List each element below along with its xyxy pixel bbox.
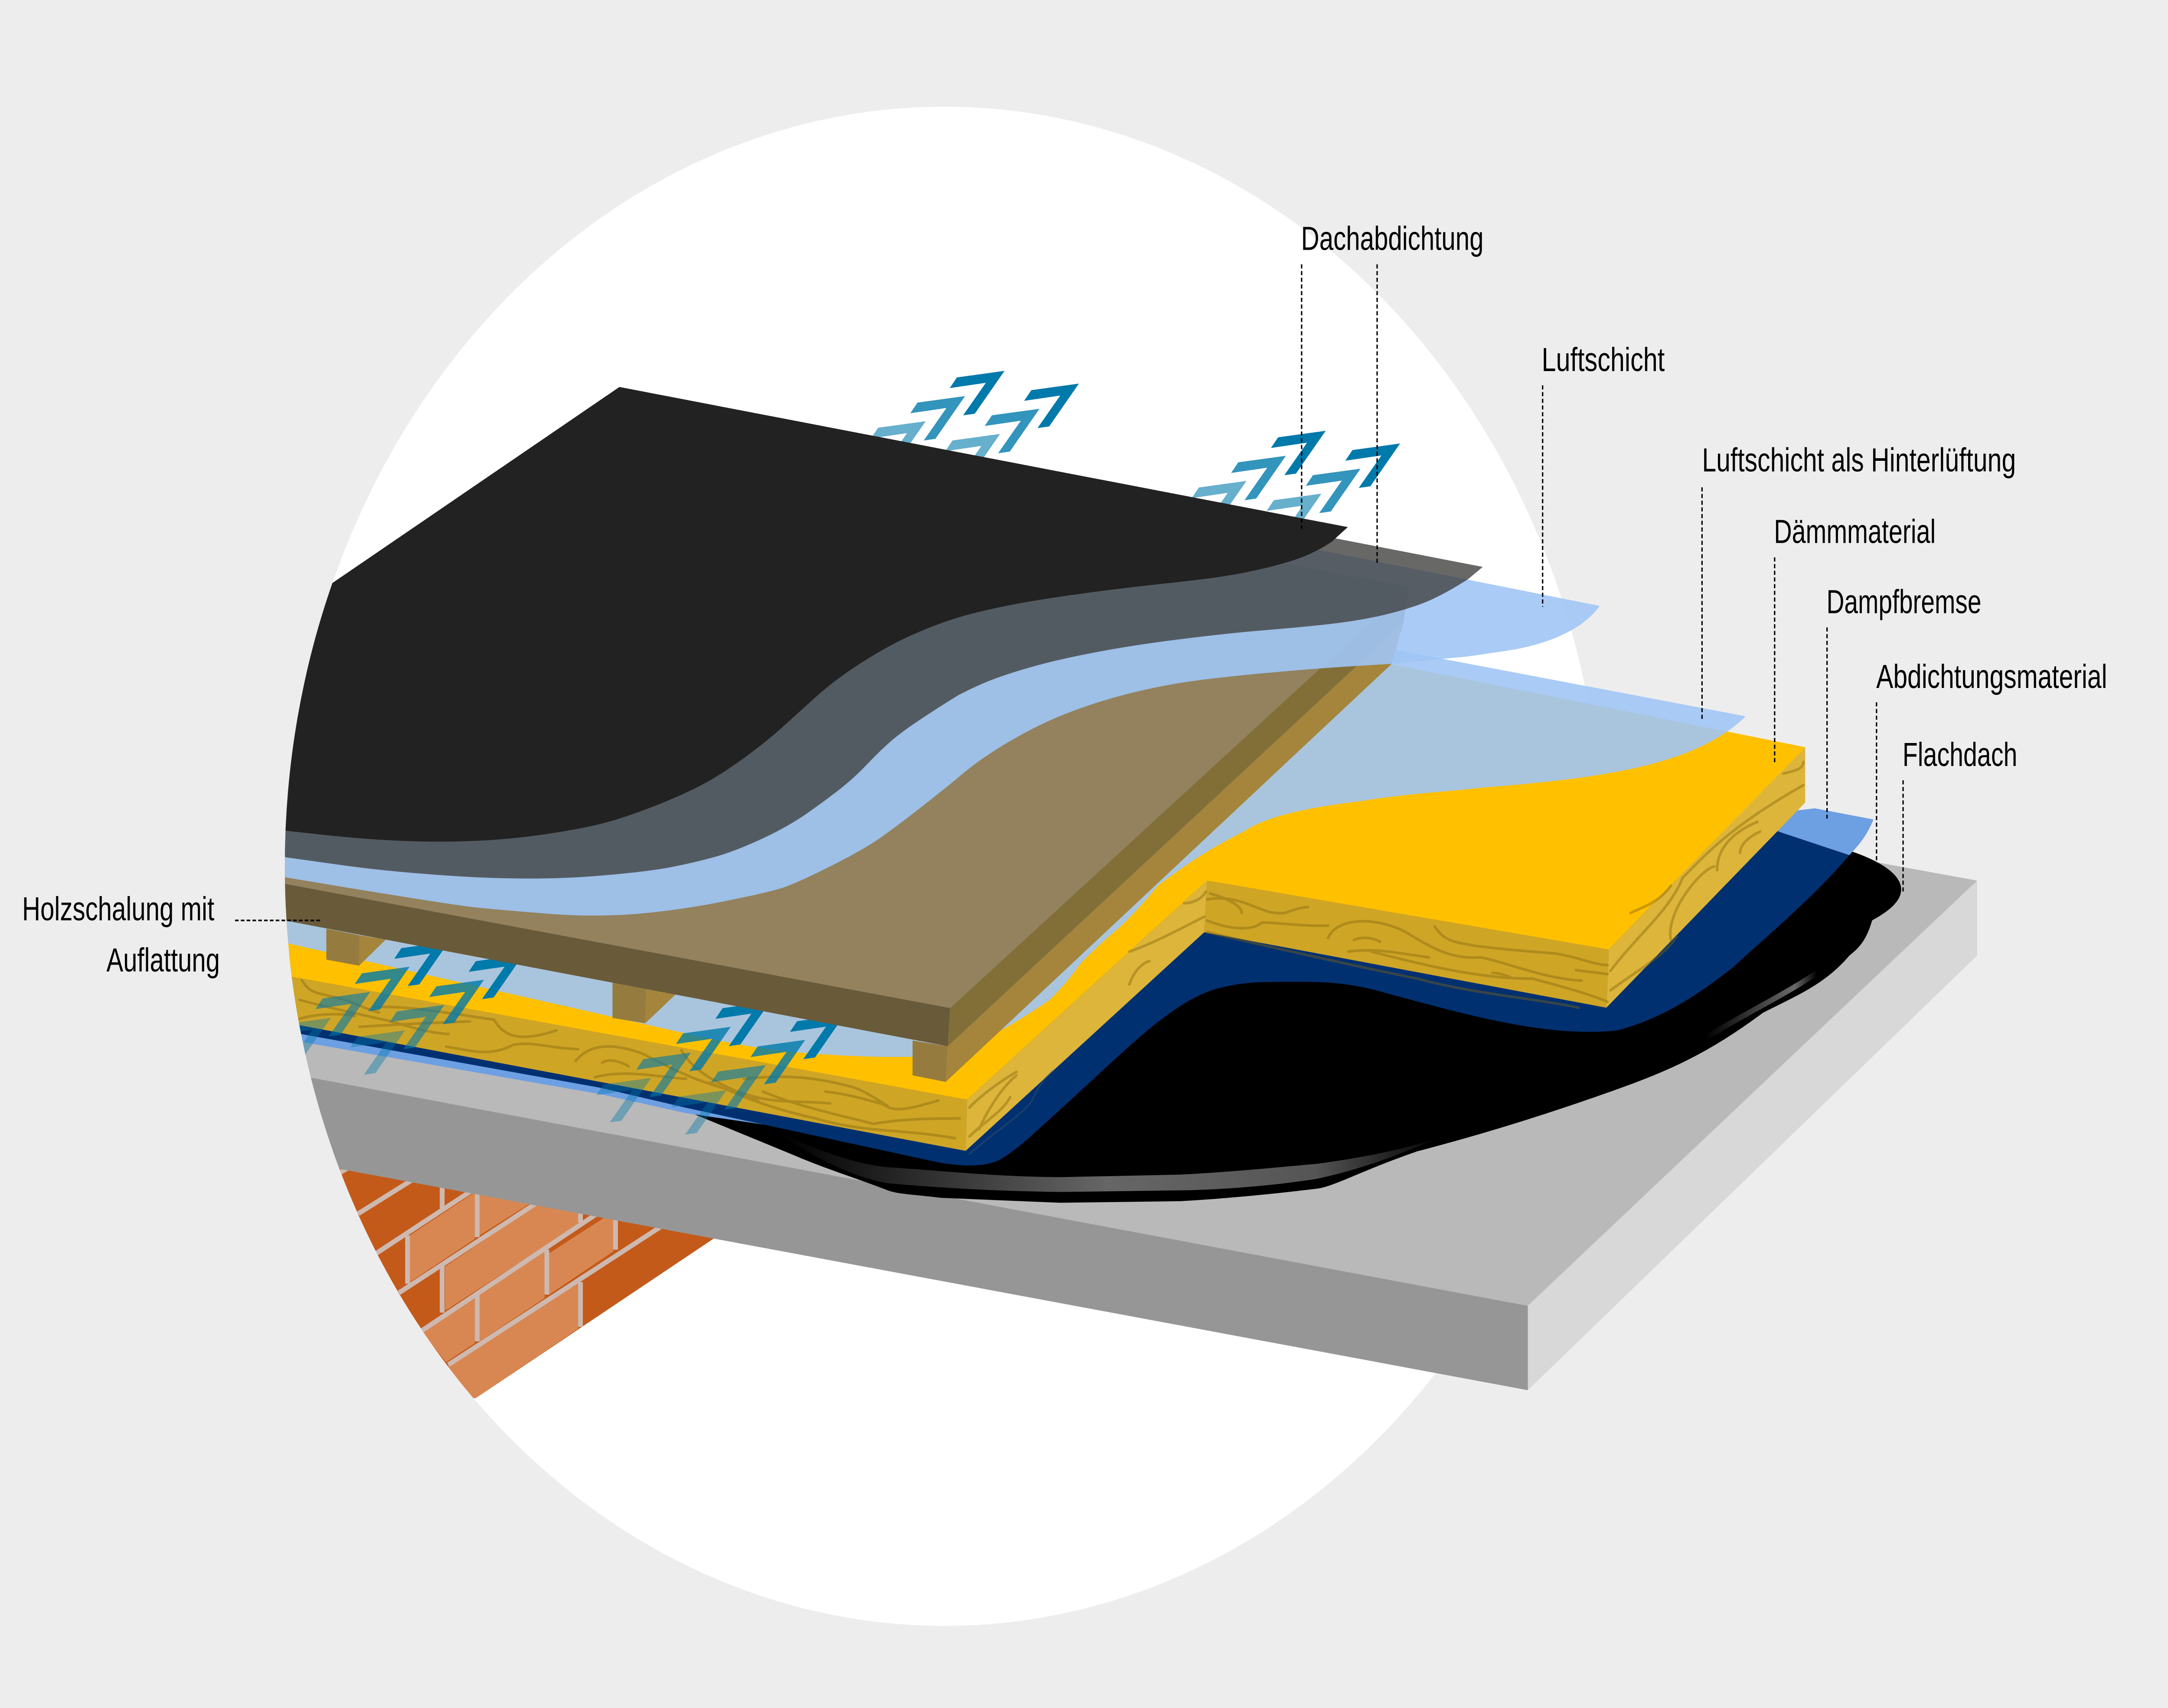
insulation timber faces <box>263 747 1805 1154</box>
label: Abdichtungsmaterial: Abdichtungsmaterial <box>1876 658 2107 695</box>
arrows: top right cluster <box>1192 431 1400 538</box>
label: Dämmmaterial: Dämmmaterial <box>1774 513 1936 551</box>
brick wall <box>312 1147 720 1398</box>
black roof waterproofing <box>263 387 1348 842</box>
grey membrane <box>263 521 1483 879</box>
arrows: lower right cluster <box>596 1002 845 1134</box>
vapour barrier <box>289 808 1874 1125</box>
navy sealing layer <box>263 831 1849 1166</box>
label: Holzschalung mit Auflattung: Holzschalung mit <box>22 891 214 928</box>
air layer sheet <box>263 546 1600 916</box>
concrete flat roof slab <box>289 863 1977 1390</box>
label: Holzschalung mit Auflattung <box>22 891 321 979</box>
wood planking <box>263 478 1409 1046</box>
rear ventilation air layer sheet <box>263 650 1746 1057</box>
label: Flachdach: Flachdach <box>1903 737 2017 773</box>
insulation top <box>263 664 1805 1100</box>
arrows: lower left cluster <box>276 942 523 1075</box>
label: Luftschicht als Hinterlüftung: Luftschicht als Hinterlüftung <box>1702 442 2016 479</box>
air flow arrows <box>276 371 1400 1134</box>
roof build-up illustration <box>263 371 1977 1398</box>
label: Dampfbremse: Dampfbremse <box>1826 583 1982 620</box>
label: Dachabdichtung: Dachabdichtung <box>1301 220 1484 258</box>
label: Luftschicht: Luftschicht <box>1541 342 1665 378</box>
arrows: top left cluster <box>872 371 1079 457</box>
label: Dachabdichtung <box>1301 220 1484 564</box>
timber battens <box>327 623 1404 1082</box>
label: Holzschalung mit Auflattung: Auflattung <box>107 942 220 979</box>
bitumen sealing layer <box>622 844 1901 1203</box>
white circle <box>285 107 1604 1626</box>
